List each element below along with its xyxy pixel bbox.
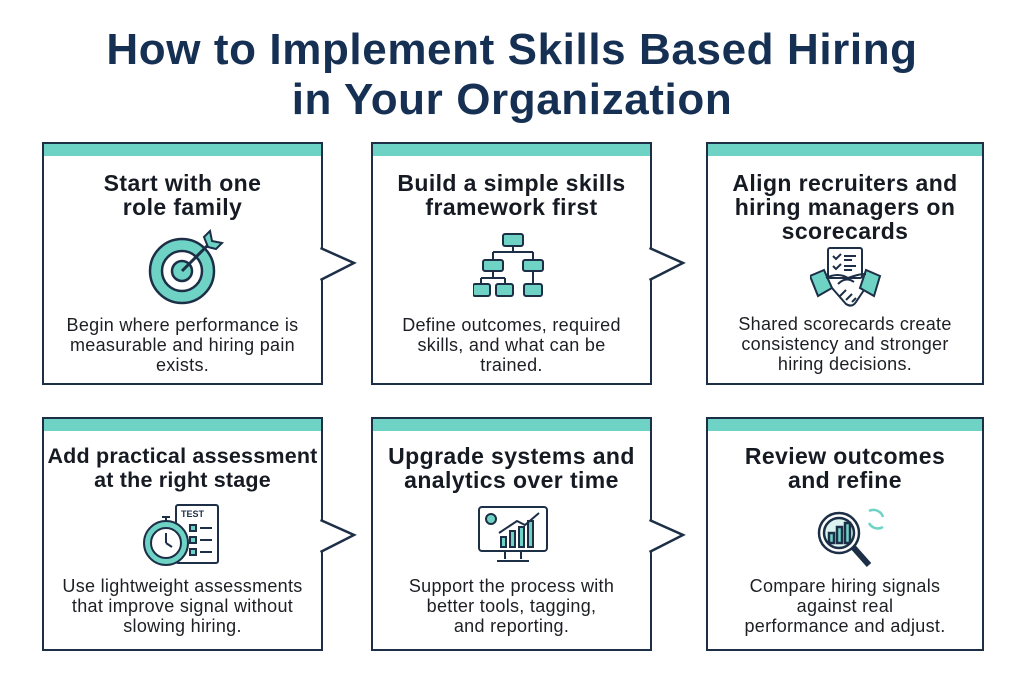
panel: upgrade systems bbox=[371, 417, 652, 651]
title: How to Implement Skills Based Hiring bbox=[106, 25, 918, 74]
title bbox=[106, 25, 918, 124]
text block bbox=[409, 576, 614, 636]
text block: measurable and hiring pain bbox=[70, 335, 295, 355]
heading: scorecards bbox=[782, 218, 908, 244]
arrow bbox=[649, 247, 686, 281]
text block: Use lightweight assessments bbox=[62, 576, 303, 596]
text block bbox=[62, 576, 303, 636]
text block bbox=[738, 314, 952, 374]
heading: Align recruiters and bbox=[732, 170, 958, 196]
panel: start with one role family bbox=[42, 142, 323, 385]
text block: better tools, tagging, bbox=[427, 596, 596, 616]
text block bbox=[67, 315, 298, 375]
text block bbox=[744, 576, 946, 636]
heading: hiring managers on bbox=[735, 194, 955, 220]
text block: performance and adjust. bbox=[744, 616, 946, 636]
icon: stopwatch and test bbox=[143, 504, 219, 566]
arrow bbox=[320, 519, 357, 553]
heading: framework first bbox=[425, 194, 598, 220]
text block: against real bbox=[797, 596, 893, 616]
heading: analytics over time bbox=[404, 467, 619, 493]
text block: Define outcomes, required bbox=[402, 315, 621, 335]
title: in Your Organization bbox=[292, 75, 732, 124]
icon: magnifier bbox=[818, 508, 884, 567]
text block: Begin where performance is bbox=[67, 315, 298, 335]
text block: consistency and stronger bbox=[741, 334, 949, 354]
heading bbox=[388, 443, 635, 493]
icon: org chart bbox=[473, 233, 544, 297]
text block bbox=[402, 315, 621, 375]
icon: handshake scorecard bbox=[810, 247, 882, 307]
text block: and reporting. bbox=[454, 616, 569, 636]
heading: Upgrade systems and bbox=[388, 443, 635, 469]
heading: Add practical assessment bbox=[47, 444, 318, 468]
heading: at the right stage bbox=[94, 468, 271, 492]
heading bbox=[745, 443, 945, 493]
text block: hiring decisions. bbox=[778, 354, 912, 374]
arrow bbox=[320, 247, 357, 281]
text block: Compare hiring signals bbox=[750, 576, 940, 596]
panel: practical assessment bbox=[42, 417, 323, 651]
heading bbox=[47, 444, 318, 492]
heading: Build a simple skills bbox=[397, 170, 626, 196]
icon: target bbox=[148, 229, 224, 304]
text block: Support the process with bbox=[409, 576, 614, 596]
heading: Review outcomes bbox=[745, 443, 945, 469]
heading: role family bbox=[123, 194, 242, 220]
text block: slowing hiring. bbox=[123, 616, 242, 636]
text block: Shared scorecards create bbox=[738, 314, 952, 334]
heading bbox=[732, 170, 958, 244]
heading: Start with one bbox=[104, 170, 261, 196]
text block: exists. bbox=[156, 355, 209, 375]
panel: skills framework bbox=[371, 142, 652, 385]
text block: that improve signal without bbox=[72, 596, 293, 616]
text block: skills, and what can be bbox=[418, 335, 606, 355]
icon: monitor chart bbox=[478, 506, 548, 562]
heading: and refine bbox=[788, 467, 902, 493]
heading bbox=[397, 170, 626, 220]
icon: stopwatch and test: TEST bbox=[181, 509, 205, 519]
arrow bbox=[649, 519, 686, 553]
panel: review outcomes bbox=[706, 417, 984, 651]
heading bbox=[104, 170, 261, 220]
text block: trained. bbox=[480, 355, 543, 375]
panel: align recruiters bbox=[706, 142, 984, 385]
